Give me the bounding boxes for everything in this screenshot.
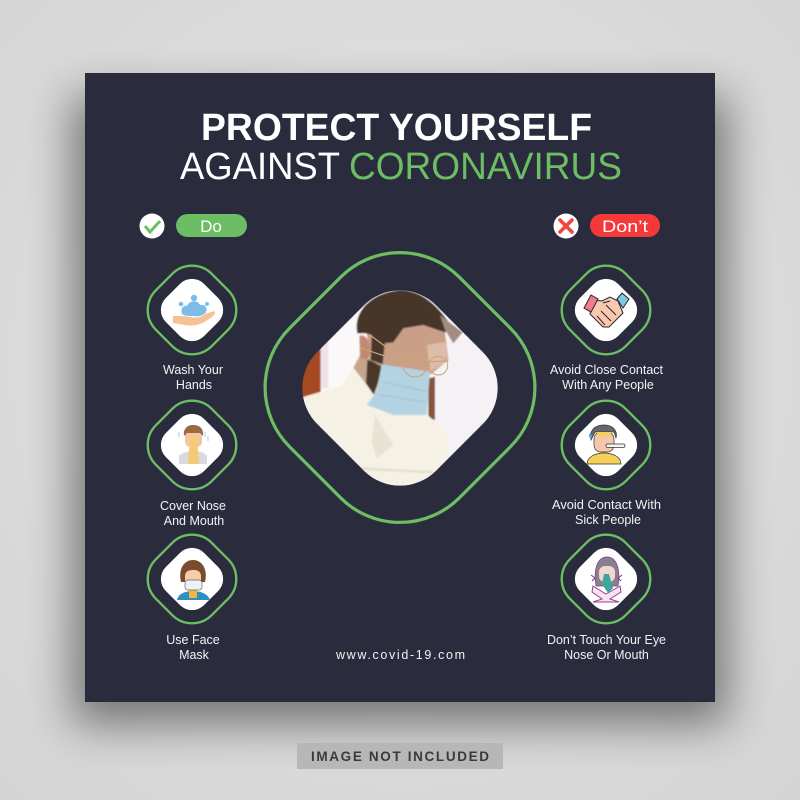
label: And Mouth xyxy=(164,514,224,528)
label: Avoid Close Contact xyxy=(550,363,664,377)
label: Sick People xyxy=(575,513,641,527)
item: avoid close contact xyxy=(550,254,664,392)
central photo xyxy=(302,290,498,486)
label: Hands xyxy=(176,378,212,392)
label: Don’t Touch Your Eye xyxy=(547,633,666,647)
title line 2 xyxy=(180,146,622,188)
item: do not touch face xyxy=(547,523,666,662)
central ring xyxy=(230,218,570,557)
do header: Do xyxy=(200,217,222,236)
item: cover nose and mouth xyxy=(136,389,248,528)
item: avoid contact with sick people xyxy=(550,389,662,527)
title line 2: CORONAVIRUS xyxy=(349,146,622,188)
website: www.covid-19.com xyxy=(335,648,465,662)
icon: covered face xyxy=(591,557,622,602)
dont header xyxy=(554,214,660,238)
panel: dark card xyxy=(85,73,715,702)
image note xyxy=(297,743,503,769)
item: wash your hands xyxy=(136,254,248,392)
icon: person covering nose xyxy=(179,425,208,464)
label: Avoid Contact With xyxy=(552,498,661,512)
image note: IMAGE NOT INCLUDED xyxy=(311,749,489,764)
card shadow xyxy=(72,95,728,725)
label: Nose Or Mouth xyxy=(564,648,649,662)
title line 2: AGAINST xyxy=(180,146,340,188)
icon: washing hand xyxy=(173,295,215,326)
label: Cover Nose xyxy=(160,499,226,513)
do header xyxy=(140,214,247,238)
icon: handshake xyxy=(584,293,629,327)
label: Mask xyxy=(179,648,210,662)
label: Wash Your xyxy=(163,363,223,377)
icon: sick person with thermometer xyxy=(587,425,625,464)
item: use face mask xyxy=(136,523,248,662)
dont header: Don’t xyxy=(602,217,648,236)
label: Use Face xyxy=(166,633,220,647)
label: With Any People xyxy=(562,378,654,392)
icon: person with mask xyxy=(177,560,210,600)
title line 1: PROTECT YOURSELF xyxy=(201,107,592,149)
